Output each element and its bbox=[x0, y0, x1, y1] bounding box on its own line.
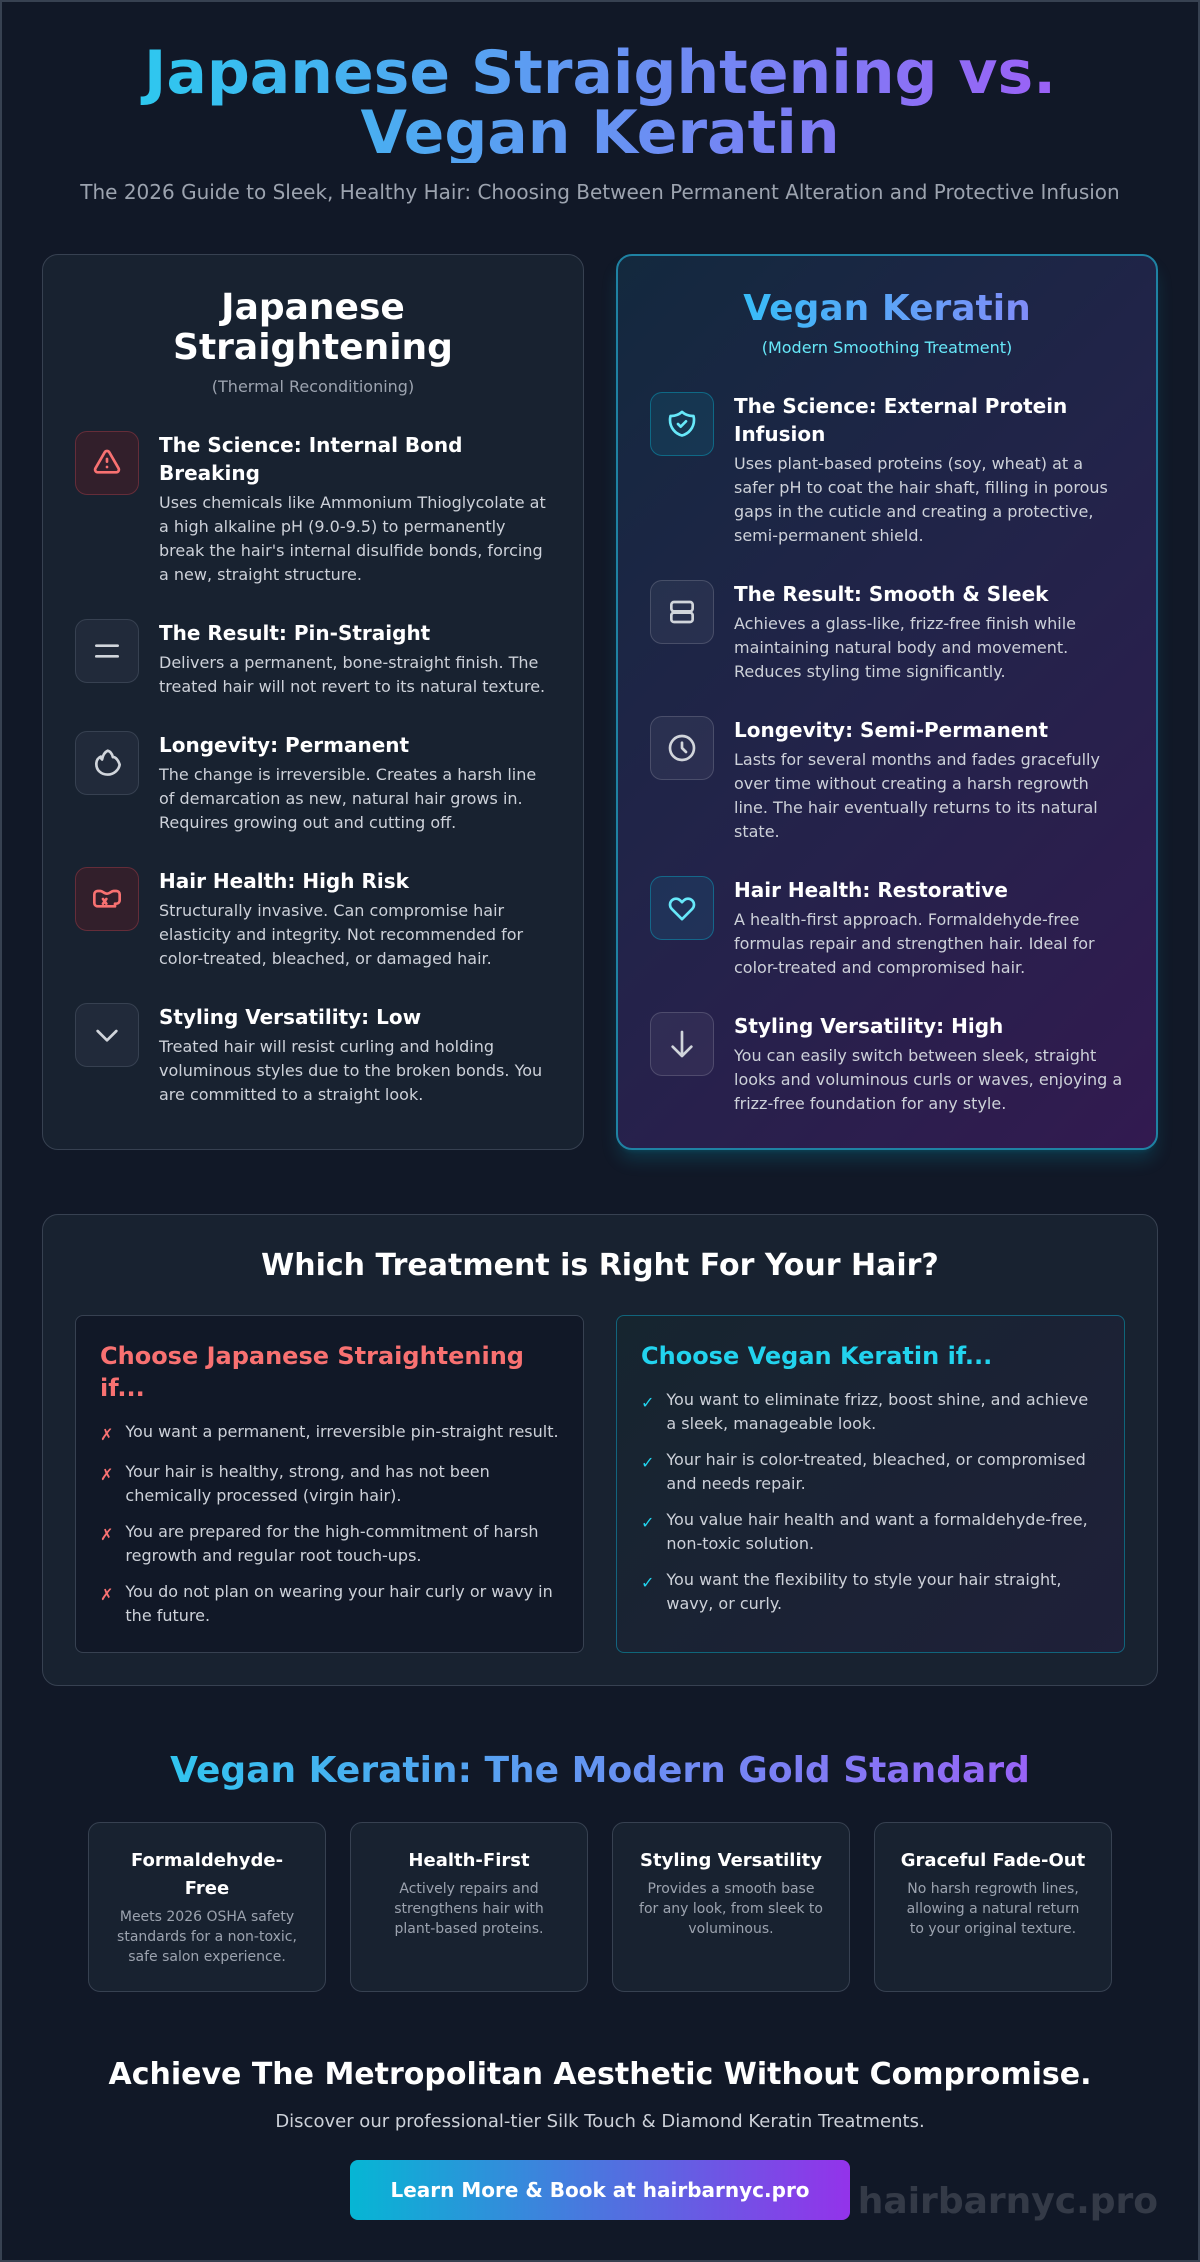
section: gold standard bbox=[88, 1750, 1112, 1992]
feature text: hair health bbox=[159, 869, 524, 968]
CTA button: Learn More & Book at hairbarnyc.pro bbox=[390, 2178, 810, 2202]
feature text: the science: The Science: External Protein Infusion bbox=[734, 394, 1067, 446]
feature text: the science bbox=[734, 394, 1108, 545]
icon: heart bbox=[650, 876, 714, 940]
title: Japanese Straightening vs. Vegan Keratin bbox=[144, 38, 1056, 168]
comparison columns bbox=[42, 254, 1161, 1165]
call to action bbox=[108, 2057, 1091, 2220]
feature text: longevity: Lasts for several months and fades gracefully over time without creating a harsh regrowth line. The hair eventually returns to its natural state. bbox=[734, 750, 1100, 841]
section heading: Vegan Keratin: The Modern Gold Standard bbox=[170, 1750, 1030, 1791]
feature list: Vegan Keratin bbox=[650, 392, 1122, 1113]
box heading: Choose Japanese Straightening if... bbox=[100, 1342, 524, 1402]
feature: longevity bbox=[75, 731, 536, 832]
checklist: Japanese Straightening: You want a permanent, irreversible pin-straight result. bbox=[125, 1422, 559, 1441]
feature: the result bbox=[75, 619, 545, 696]
feature text: hair health: A health-first approach. Formaldehyde-free formulas repair and strengthen hair. Ideal for color-treated and compromised hair. bbox=[734, 910, 1095, 977]
feature text: the science: Uses plant-based proteins (soy, wheat) at a safer pH to coat the hair shaft, filling in porous gaps in the cuticle and creating a protective, semi-permanent shield. bbox=[734, 454, 1108, 545]
feature: the science bbox=[75, 431, 546, 584]
checklist: Japanese Straightening: ✗ bbox=[100, 1465, 113, 1484]
feature text: styling versatility: You can easily switch between sleek, straight looks and voluminous curls or waves, enjoying a frizz-free foundation for any style. bbox=[734, 1046, 1122, 1113]
CTA text: Discover our professional-tier Silk Touch & Diamond Keratin Treatments. bbox=[275, 2111, 925, 2132]
panel: which treatment bbox=[42, 1214, 1158, 1686]
feature text: the result bbox=[734, 582, 1076, 681]
card: formaldehyde-free: Formaldehyde-Free bbox=[131, 1850, 283, 1899]
card: formaldehyde-free bbox=[88, 1822, 326, 1992]
panel: Vegan Keratin bbox=[616, 254, 1158, 1150]
checklist: Vegan Keratin: You want to eliminate frizz, boost shine, and achieve a sleek, manageable look. bbox=[666, 1390, 1088, 1433]
box: choose Vegan Keratin bbox=[616, 1315, 1125, 1653]
card: graceful fade-out: Graceful Fade-Out bbox=[901, 1850, 1085, 1871]
feature text: longevity: The change is irreversible. Creates a harsh line of demarcation as new, natural hair grows in. Requires growing out and cutting off. bbox=[159, 765, 536, 832]
feature text: longevity: Longevity: Permanent bbox=[159, 733, 409, 757]
feature: hair health bbox=[650, 876, 1095, 977]
icon: stacked layers bbox=[650, 580, 714, 644]
icon: shield check bbox=[650, 392, 714, 456]
checklist: Vegan Keratin: ✓ bbox=[641, 1573, 654, 1592]
card: health-first bbox=[350, 1822, 588, 1992]
feature text: styling versatility: Styling Versatility: High bbox=[734, 1014, 1003, 1038]
feature text: styling versatility: Treated hair will resist curling and holding voluminous styles due to the broken bonds. You are committed to a straight look. bbox=[159, 1037, 542, 1104]
feature text: the result: The Result: Smooth & Sleek bbox=[734, 582, 1048, 606]
panel tagline: (Thermal Reconditioning) bbox=[212, 377, 414, 396]
card: styling versatility: Provides a smooth base for any look, from sleek to voluminous. bbox=[639, 1881, 823, 1937]
feature text: the result bbox=[159, 621, 545, 696]
panel: Japanese Straightening bbox=[42, 254, 584, 1150]
checklist: Vegan Keratin: You value hair health and want a formaldehyde-free, non-toxic solution. bbox=[666, 1510, 1088, 1553]
feature list: Japanese Straightening bbox=[75, 431, 546, 1104]
icon: damaged hair bbox=[75, 867, 139, 931]
CTA button bbox=[350, 2160, 850, 2220]
feature text: longevity: Longevity: Semi-Permanent bbox=[734, 718, 1048, 742]
box heading: Choose Vegan Keratin if... bbox=[641, 1342, 992, 1370]
benefit cards bbox=[88, 1822, 1112, 1992]
feature: styling versatility bbox=[650, 1012, 1122, 1113]
checklist: Japanese Straightening bbox=[100, 1422, 559, 1625]
decision boxes bbox=[75, 1315, 1125, 1653]
card: styling versatility bbox=[612, 1822, 850, 1992]
checklist: Japanese Straightening: You are prepared for the high-commitment of harsh regrowth and regular root touch-ups. bbox=[125, 1522, 539, 1565]
feature text: the science: Uses chemicals like Ammonium Thioglycolate at a high alkaline pH (9.0-9.5) to permanently break the hair's internal disulfide bonds, forcing a new, straight structure. bbox=[159, 493, 546, 584]
feature text: hair health: Structurally invasive. Can compromise hair elasticity and integrity. Not recommended for color-treated, bleached, or damaged hair. bbox=[159, 901, 523, 968]
panel heading: Japanese Straightening: Japanese Straightening bbox=[173, 287, 453, 368]
panel tagline: (Modern Smoothing Treatment) bbox=[762, 338, 1012, 357]
box: choose Japanese Straightening bbox=[75, 1315, 584, 1653]
feature text: the result: The Result: Pin-Straight bbox=[159, 621, 430, 645]
card: graceful fade-out: No harsh regrowth lines, allowing a natural return to your original texture. bbox=[907, 1881, 1079, 1937]
icon: chevron down bbox=[75, 1003, 139, 1067]
card: graceful fade-out bbox=[874, 1822, 1112, 1992]
icon: flame bbox=[75, 731, 139, 795]
feature: the result bbox=[650, 580, 1076, 681]
feature text: hair health bbox=[734, 878, 1095, 977]
feature text: the result: Achieves a glass-like, frizz-free finish while maintaining natural body and movement. Reduces styling time significantly. bbox=[734, 614, 1076, 681]
feature text: styling versatility: Styling Versatility: Low bbox=[159, 1005, 421, 1029]
feature text: the science: The Science: Internal Bond Breaking bbox=[159, 433, 462, 485]
icon: clock bbox=[650, 716, 714, 780]
feature text: the science bbox=[159, 433, 546, 584]
subtitle: The 2026 Guide to Sleek, Healthy Hair: Choosing Between Permanent Alteration and Protective Infusion bbox=[80, 180, 1120, 204]
card: health-first: Health-First bbox=[408, 1850, 530, 1871]
checklist: Vegan Keratin: ✓ bbox=[641, 1453, 654, 1472]
checklist: Vegan Keratin: Your hair is color-treated, bleached, or compromised and needs repair. bbox=[666, 1450, 1086, 1493]
card: formaldehyde-free: Meets 2026 OSHA safety standards for a non-toxic, safe salon experience. bbox=[117, 1909, 297, 1965]
checklist: Japanese Straightening: You do not plan on wearing your hair curly or wavy in the future. bbox=[125, 1582, 553, 1625]
CTA heading: Achieve The Metropolitan Aesthetic Without Compromise. bbox=[108, 2057, 1091, 2092]
feature: hair health bbox=[75, 867, 524, 968]
card: styling versatility: Styling Versatility bbox=[640, 1850, 822, 1871]
feature: styling versatility bbox=[75, 1003, 542, 1104]
icon: arrow down bbox=[650, 1012, 714, 1076]
section heading: Which Treatment is Right For Your Hair? bbox=[261, 1248, 939, 1283]
checklist: Vegan Keratin: You want the flexibility to style your hair straight, wavy, or curly. bbox=[666, 1570, 1062, 1613]
checklist: Japanese Straightening: ✗ bbox=[100, 1425, 113, 1444]
feature: longevity bbox=[650, 716, 1100, 841]
panel heading: Vegan Keratin: Vegan Keratin bbox=[743, 288, 1031, 329]
feature: the science bbox=[650, 392, 1108, 545]
feature text: styling versatility bbox=[158, 1005, 542, 1104]
feature text: hair health: Hair Health: Restorative bbox=[734, 878, 1008, 902]
watermark: hairbarnyc.pro bbox=[858, 2181, 1158, 2222]
feature text: the result: Delivers a permanent, bone-straight finish. The treated hair will not revert to its natural texture. bbox=[159, 653, 545, 696]
feature text: hair health: Hair Health: High Risk bbox=[159, 869, 409, 893]
feature text: longevity bbox=[158, 733, 536, 832]
checklist: Japanese Straightening: ✗ bbox=[100, 1585, 113, 1604]
checklist: Japanese Straightening: Your hair is healthy, strong, and has not been chemically processed (virgin hair). bbox=[125, 1462, 490, 1505]
checklist: Japanese Straightening: ✗ bbox=[100, 1525, 113, 1544]
feature text: styling versatility bbox=[734, 1014, 1122, 1113]
checklist: Vegan Keratin: ✓ bbox=[641, 1393, 654, 1412]
icon: straight lines bbox=[75, 619, 139, 683]
icon: warning triangle bbox=[75, 431, 139, 495]
checklist: Vegan Keratin bbox=[641, 1390, 1088, 1613]
checklist: Vegan Keratin: ✓ bbox=[641, 1513, 654, 1532]
card: health-first: Actively repairs and strengthens hair with plant-based proteins. bbox=[394, 1881, 544, 1937]
